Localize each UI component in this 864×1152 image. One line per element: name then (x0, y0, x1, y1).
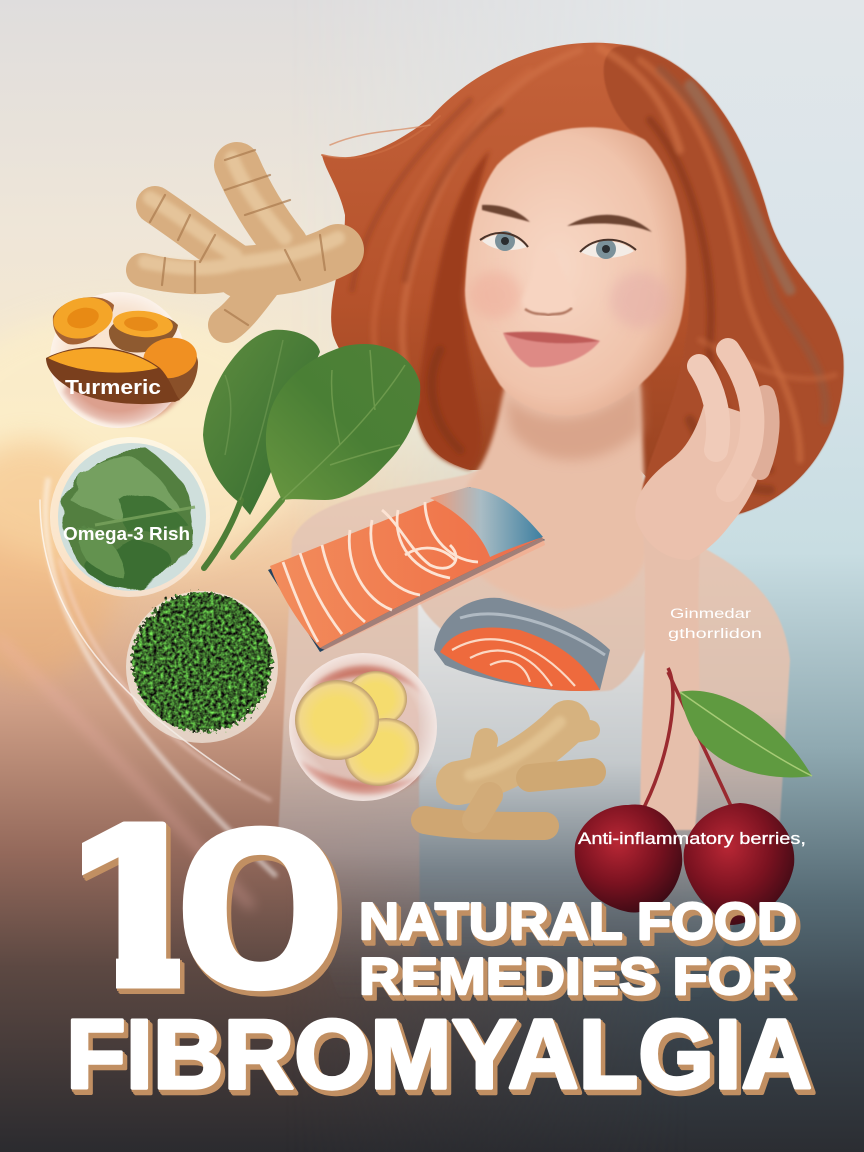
shoulders and chest (278, 470, 790, 1000)
title (70, 822, 816, 1096)
bubble: green leaves, Omega-3 label (50, 437, 210, 597)
eyes (480, 231, 636, 259)
cherry leaf (680, 691, 812, 777)
salmon fillet, large (268, 487, 545, 652)
bubble: ginger slices (289, 653, 437, 801)
ginger root, lower (425, 722, 592, 826)
bubble: chopped herbs (126, 591, 278, 743)
face (465, 127, 686, 415)
hair side shadow (415, 150, 490, 470)
turmeric slices (46, 292, 200, 404)
cheek blush (469, 271, 521, 319)
cherries (575, 803, 794, 925)
salmon steak, small (434, 598, 610, 691)
hair right section (604, 46, 843, 516)
hair strands (352, 48, 835, 490)
title line: FIBROMYALGIA: FIBROMYALGIA (66, 999, 812, 1109)
back hair (322, 43, 843, 515)
label: Turmeric: Turmeric (65, 376, 161, 399)
title number 10 (82, 822, 342, 997)
label: Anti-inflammatory berries: Anti-inflammatory berries, (578, 829, 806, 848)
nose (522, 250, 575, 316)
light swirl streaks (0, 480, 275, 905)
neck (440, 370, 650, 610)
cherry stems (640, 668, 735, 815)
flyaway hair (322, 116, 440, 158)
label: Ginmedar gthorrlidon: Ginmedar (670, 606, 752, 621)
bubble: turmeric (46, 292, 200, 428)
label: Ginmedar gthorrlidon (668, 606, 762, 641)
title line: NATURAL FOOD: NATURAL FOOD (359, 893, 797, 951)
back leaf (203, 330, 320, 515)
woman portrait (278, 43, 843, 1000)
title number 10: 0 (181, 789, 339, 1028)
tank top (418, 600, 655, 960)
neck shadow (505, 380, 642, 460)
lips (503, 332, 600, 367)
spinach leaves (203, 330, 420, 568)
ginger root, top (143, 150, 338, 325)
label: Ginmedar gthorrlidon: gthorrlidon (668, 626, 762, 641)
hand and fingers (635, 350, 770, 560)
title number 10: 1 (54, 774, 217, 1036)
front leaf (266, 344, 420, 500)
eyebrows (482, 205, 652, 232)
forearm (640, 520, 700, 830)
label: Omega-3 Rish: Omega-3 Rish (63, 524, 190, 544)
title line: REMEDIES FOR: REMEDIES FOR (359, 948, 793, 1006)
